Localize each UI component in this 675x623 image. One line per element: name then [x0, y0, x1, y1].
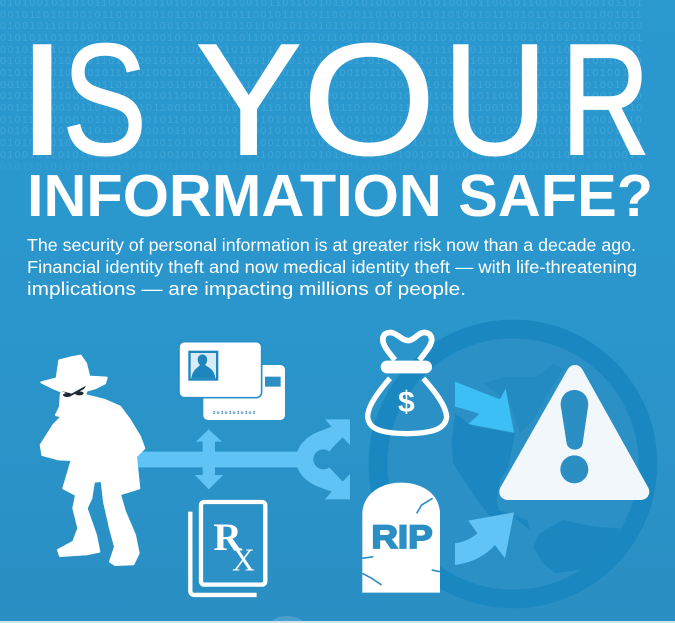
sunglasses — [62, 386, 86, 397]
arrow: tombstone to warning — [455, 512, 514, 565]
binary code background pattern: 00101101010010110101001011001011011001011010110010110100101101010010110010110101101001011 — [0, 125, 643, 137]
title: IS YOUR: S — [62, 12, 147, 188]
title: IS YOUR: Y — [196, 12, 301, 188]
title: IS YOUR: U — [443, 12, 547, 188]
binary code background pattern: 01011010100101101010010110010110110010110101100101101001011010100101100101101011010010110 — [0, 161, 643, 173]
icon: ID and credit cards — [179, 342, 285, 420]
icon: prescription: R — [213, 515, 242, 559]
icon: ID and credit cards: IoIoIoIoIoI — [213, 410, 257, 416]
binary code background pattern: 01001011010100101101010010110010110110010110101100101101001011010100101100101101011010010 — [0, 149, 644, 161]
binary code background pattern: 00101101010010110101001011001011011001011010110010110100101101010010110010110101101001011 — [0, 79, 643, 91]
icon: money bag: $ — [398, 386, 415, 419]
continents — [452, 363, 620, 573]
title: IS YOUR: I — [18, 12, 66, 188]
icon: prescription — [190, 502, 265, 595]
globe — [378, 329, 648, 599]
binary code background pattern: 01011010100101101010010110010110110010110101100101101001011010100101100101101011010010110 — [0, 90, 643, 102]
binary code background pattern: 00101010010110101001011001011011001011010110010110100101101010010110010110101101001011010 — [0, 102, 644, 114]
binary code background pattern: 01010110101001011010100101100101101100101101011001011010010110101001011001011010110100101 — [0, 32, 644, 44]
intro text: Financial identity theft and now medical identity theft — with life-threatening — [27, 257, 637, 277]
icon: tombstone: RIP — [371, 519, 433, 555]
icon: tombstone — [362, 483, 440, 593]
icon: thief silhouette — [41, 356, 144, 565]
icon: money bag — [368, 333, 447, 434]
icon: prescription: X — [232, 543, 255, 578]
intro text: The security of personal information is at greater risk now than a decade ago. — [27, 235, 636, 255]
binary code background pattern — [0, 0, 644, 173]
title: INFORMATION SAFE?: INFORMATION SAFE? — [27, 163, 653, 229]
intro text — [27, 235, 637, 299]
arrows: branching connector — [135, 419, 350, 499]
binary code background pattern: 01011010100101101010010110010110110010110101100101101001011010100101100101101011010010110 — [0, 55, 643, 67]
title: IS YOUR: O — [303, 11, 435, 188]
title: IS YOUR — [18, 11, 650, 189]
arrow: money to warning — [455, 382, 514, 433]
binary code background pattern: 00101101010010110101001011001011011001011010110010110100101101010010110010110101101001011 — [0, 44, 643, 56]
bottom strip — [0, 616, 675, 623]
binary code background pattern: 01011010100101101010010110010110110010110101100101101001011010100101100101101011010010110 — [0, 114, 643, 126]
intro text: implications — are impacting millions of people. — [27, 279, 466, 299]
warning triangle — [508, 373, 641, 492]
binary code background pattern: 00101101010010110101001011001011011001011010110010110100101101010010110010110101101001011 — [0, 9, 643, 21]
binary code background pattern: 01001011010100101101010010110010110110010110101100101101001011010100101100101101011010010 — [0, 20, 644, 32]
binary code background pattern: 01010110101001011010100101100101101100101101011001011010010110101001011001011010110100101 — [0, 67, 644, 79]
title: IS YOUR: R — [561, 12, 650, 189]
binary code background pattern: 01010110101001011010100101100101101100101101011001011010010110101001011001011010110100101 — [0, 137, 644, 149]
